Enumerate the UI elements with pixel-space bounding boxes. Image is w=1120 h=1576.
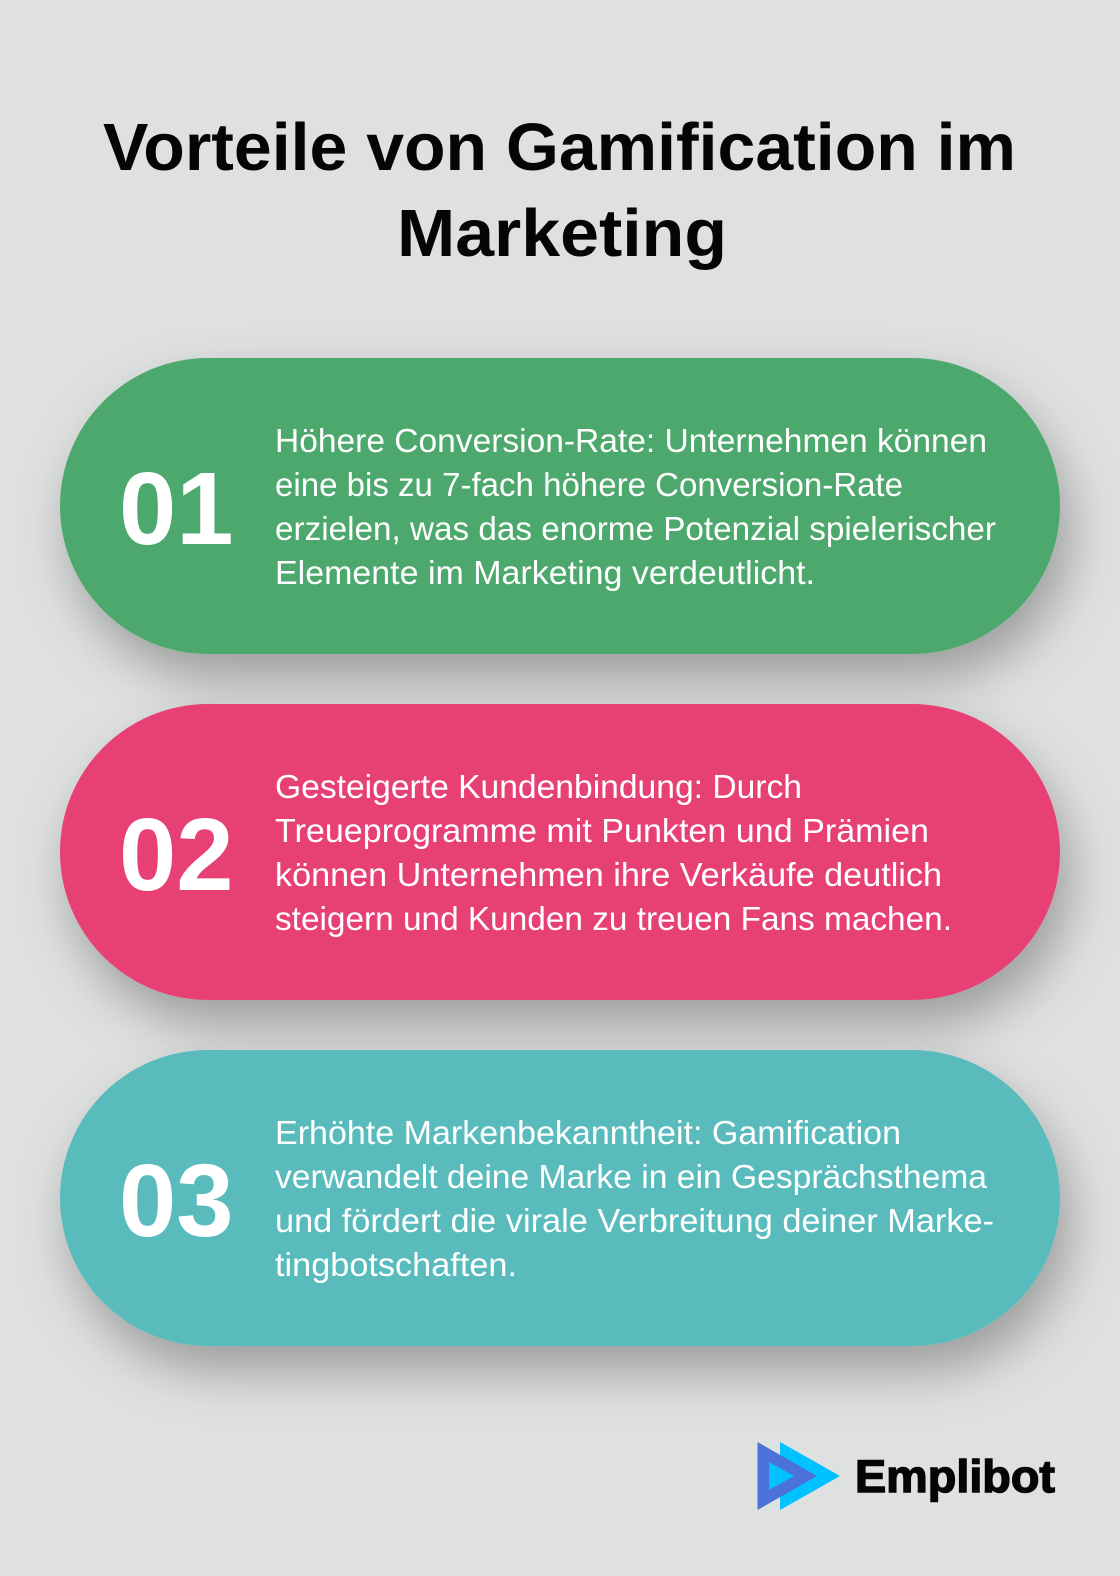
text: benefit 01: Höhere Conversion-Rate: Unternehmen können xyxy=(275,423,987,460)
panel: benefit 03 xyxy=(60,1050,1060,1346)
number 03: 03 xyxy=(119,1143,234,1258)
panel: benefit 01 xyxy=(60,358,1060,654)
text: benefit 01 xyxy=(275,423,996,592)
text: benefit 02: Gesteigerte Kundenbindung: Durch xyxy=(275,769,802,806)
text: benefit 01: eine bis zu 7-fach höhere Conversion-Rate xyxy=(275,467,903,504)
title: Vorteile von Gamification im xyxy=(103,110,1016,185)
wordmark: Emplibot xyxy=(855,1451,1055,1502)
text: benefit 01: erzielen, was das enorme Potenzial spielerischer xyxy=(275,511,996,548)
text: benefit 03: tingbotschaften. xyxy=(275,1247,517,1284)
title: Marketing xyxy=(397,196,727,271)
text: benefit 01: Elemente im Marketing verdeutlicht. xyxy=(275,555,815,592)
number 02: 02 xyxy=(119,797,234,912)
text: benefit 03: und fördert die virale Verbreitung deiner Marke- xyxy=(275,1203,994,1240)
panel: benefit 02 xyxy=(60,704,1060,1000)
text: benefit 02: können Unternehmen ihre Verkäufe deutlich xyxy=(275,857,942,894)
text: benefit 03: Erhöhte Markenbekanntheit: Gamification xyxy=(275,1115,901,1152)
text: benefit 02: Treueprogramme mit Punkten und Prämien xyxy=(275,813,929,850)
number 01: 01 xyxy=(119,451,234,566)
title xyxy=(103,110,1016,271)
icon: play triangles xyxy=(758,1442,840,1510)
text: benefit 03: verwandelt deine Marke in ein Gesprächsthema xyxy=(275,1159,987,1196)
text: benefit 02 xyxy=(275,769,952,938)
text: benefit 03 xyxy=(275,1115,994,1284)
text: benefit 02: steigern und Kunden zu treuen Fans machen. xyxy=(275,901,952,938)
logo: Emplibot xyxy=(758,1442,1055,1510)
